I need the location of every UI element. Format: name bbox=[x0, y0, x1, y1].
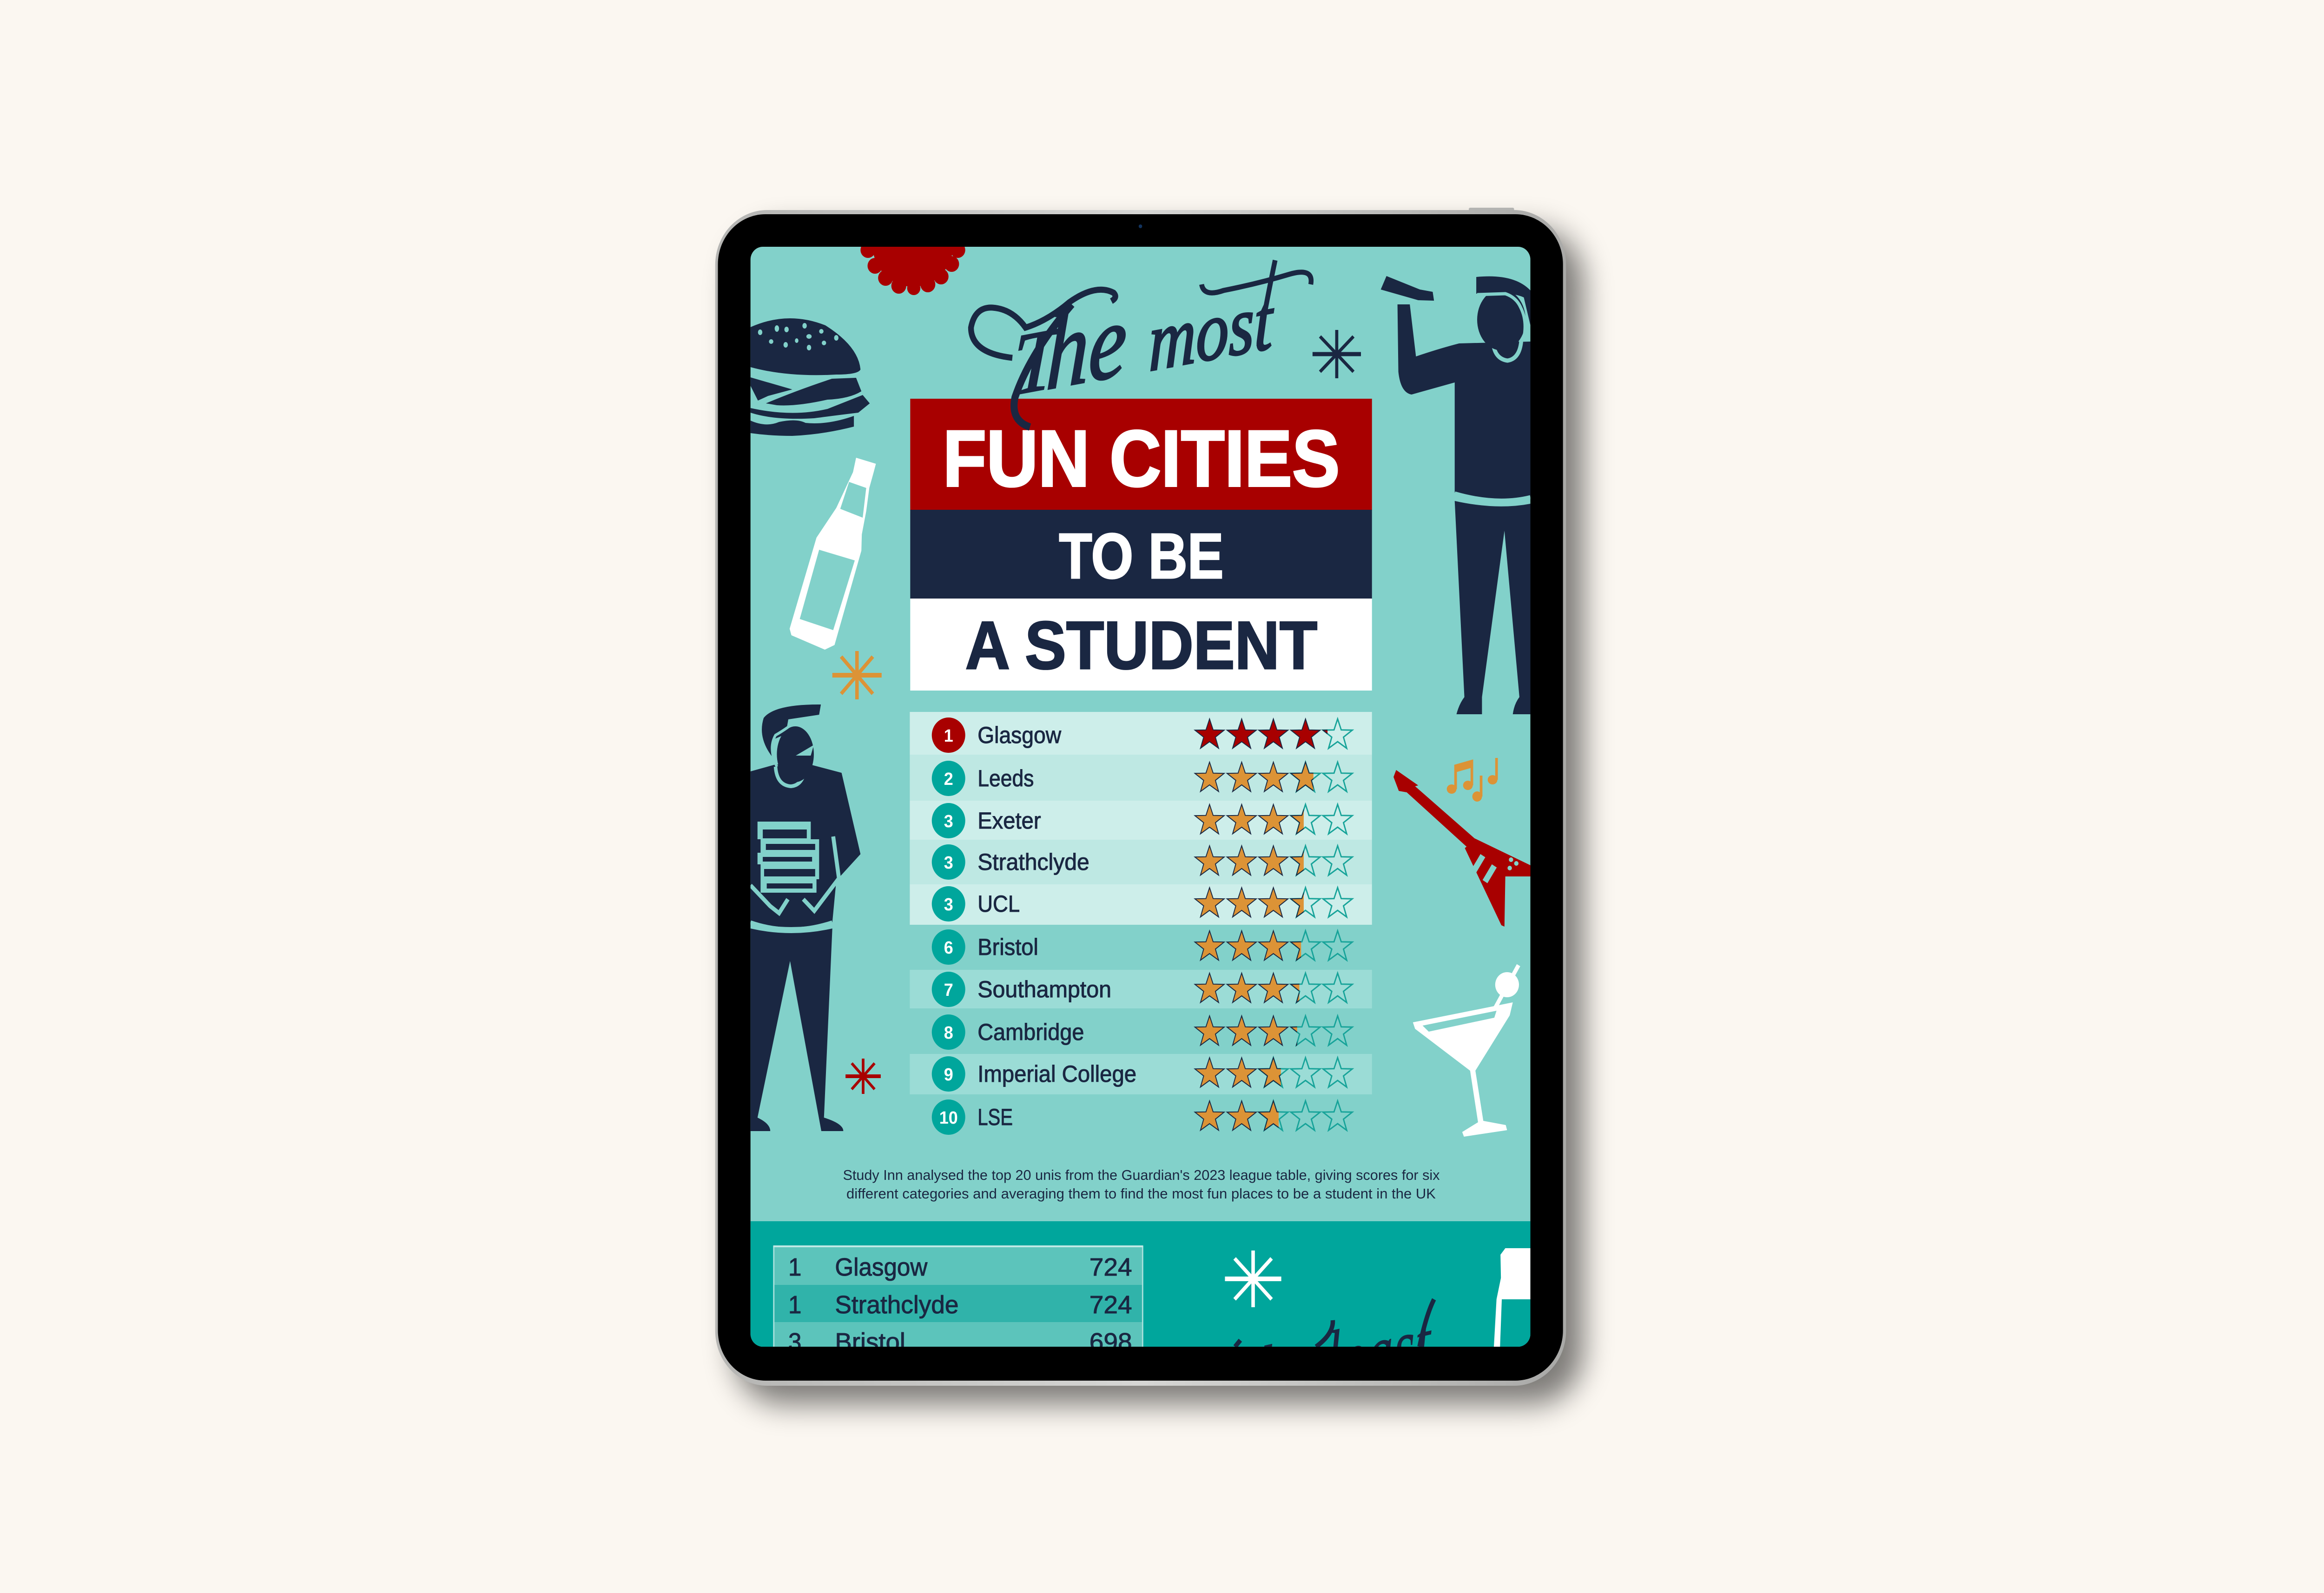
row: 10 LSE: LSE bbox=[977, 1105, 1013, 1130]
table: second ranking: 698 bbox=[1089, 1328, 1132, 1356]
row: 2 Leeds: 2 bbox=[944, 769, 953, 789]
row: 3 UCL: UCL bbox=[977, 891, 1020, 917]
row: 10 LSE: 10 bbox=[939, 1108, 958, 1127]
title: The most script bbox=[971, 260, 1311, 427]
table: second ranking: 724 bbox=[1089, 1291, 1132, 1319]
row: 3 Strathclyde bbox=[932, 844, 1352, 880]
icon: red scalloped flower bbox=[860, 247, 965, 295]
icon: white beer bottle bbox=[790, 458, 876, 650]
icon: burger bbox=[751, 318, 870, 436]
text block: methodology note: different categories and averaging them to find the most fun places to be a student in the UK bbox=[846, 1186, 1436, 1202]
icon: white bottle cropped at edge bbox=[1494, 1248, 1531, 1347]
banner: red band bbox=[910, 399, 1372, 510]
row: 6 Bristol bbox=[932, 929, 1352, 965]
banner: white band bbox=[910, 599, 1372, 691]
row: 1 Glasgow: Glasgow bbox=[977, 723, 1062, 748]
heading: cropped script title bbox=[1228, 1289, 1434, 1441]
row: 1 Glasgow: 1 bbox=[944, 726, 953, 745]
row: 10 LSE bbox=[932, 1099, 1352, 1135]
icon: white martini glass bbox=[1413, 965, 1519, 1137]
panel: dark teal lower section bbox=[751, 1221, 1531, 1347]
icon: stack of books bbox=[751, 822, 839, 913]
text block: methodology note: Study Inn analysed the top 20 unis from the Guardian's 2023 league table, giving scores for six bbox=[843, 1167, 1440, 1183]
text block: methodology note bbox=[843, 1167, 1440, 1202]
table: second ranking: 724 bbox=[1089, 1253, 1132, 1281]
row: 3 Strathclyde: 3 bbox=[944, 853, 953, 872]
icon: white asterisk bbox=[1225, 1251, 1281, 1307]
row: 7 Southampton bbox=[932, 972, 1352, 1007]
row: 3 Exeter: 3 bbox=[944, 811, 953, 831]
row: 3 Exeter bbox=[932, 803, 1352, 838]
row: 8 Cambridge: 8 bbox=[944, 1023, 953, 1042]
row: 8 Cambridge: Cambridge bbox=[977, 1020, 1084, 1045]
table: second ranking: Glasgow bbox=[835, 1253, 928, 1281]
title: The most script: most bbox=[1149, 273, 1274, 389]
table: second ranking: 3 bbox=[788, 1328, 801, 1356]
row: 3 UCL bbox=[932, 886, 1352, 922]
row: 9 Imperial College bbox=[932, 1056, 1352, 1092]
figure: man drinking from bottle bbox=[1381, 276, 1531, 714]
row: 3 Strathclyde: Strathclyde bbox=[977, 849, 1089, 875]
row: 9 Imperial College: Imperial College bbox=[977, 1061, 1136, 1087]
icon: red asterisk bbox=[845, 1059, 881, 1094]
heading: cropped script title: The least bbox=[1228, 1289, 1432, 1441]
banner: navy band bbox=[910, 510, 1372, 599]
title: The most script: T bbox=[1012, 308, 1064, 414]
row: 1 Glasgow bbox=[932, 718, 1352, 753]
row: 9 Imperial College: 9 bbox=[944, 1065, 953, 1084]
row: 3 Exeter: Exeter bbox=[977, 808, 1041, 834]
icon: navy asterisk bbox=[1313, 330, 1361, 378]
tablet device frame bbox=[715, 208, 1566, 1386]
tablet drop shadow bbox=[733, 229, 1584, 1404]
heading: A STUDENT: A STUDENT bbox=[965, 608, 1317, 684]
ranking table: top ten fun cities bbox=[910, 712, 1372, 1135]
table: second ranking: 1 bbox=[788, 1253, 801, 1281]
row: 3 UCL: 3 bbox=[944, 895, 953, 914]
icon: orange asterisk bbox=[832, 651, 882, 699]
table: second ranking bbox=[773, 1245, 1143, 1356]
row: 8 Cambridge bbox=[932, 1014, 1352, 1050]
row: 7 Southampton: 7 bbox=[944, 980, 953, 1000]
heading: TO BE: TO BE bbox=[1059, 520, 1224, 592]
row: 2 Leeds bbox=[932, 761, 1352, 796]
row: 7 Southampton: Southampton bbox=[977, 977, 1111, 1002]
heading: FUN CITIES: FUN CITIES bbox=[943, 414, 1340, 503]
row: 2 Leeds: Leeds bbox=[977, 766, 1034, 791]
infographic screen bbox=[750, 247, 1531, 1347]
table: second ranking: Strathclyde bbox=[835, 1291, 959, 1319]
row: 6 Bristol: 6 bbox=[944, 938, 953, 957]
icon: red flying-V guitar bbox=[1393, 770, 1531, 927]
title: The most script: he bbox=[1044, 279, 1129, 413]
figure: man holding books bbox=[751, 704, 860, 1131]
table: second ranking: Bristol bbox=[835, 1328, 905, 1356]
icon: music notes bbox=[1447, 758, 1498, 802]
row: 6 Bristol: Bristol bbox=[977, 935, 1038, 960]
table: second ranking: 1 bbox=[788, 1291, 801, 1319]
